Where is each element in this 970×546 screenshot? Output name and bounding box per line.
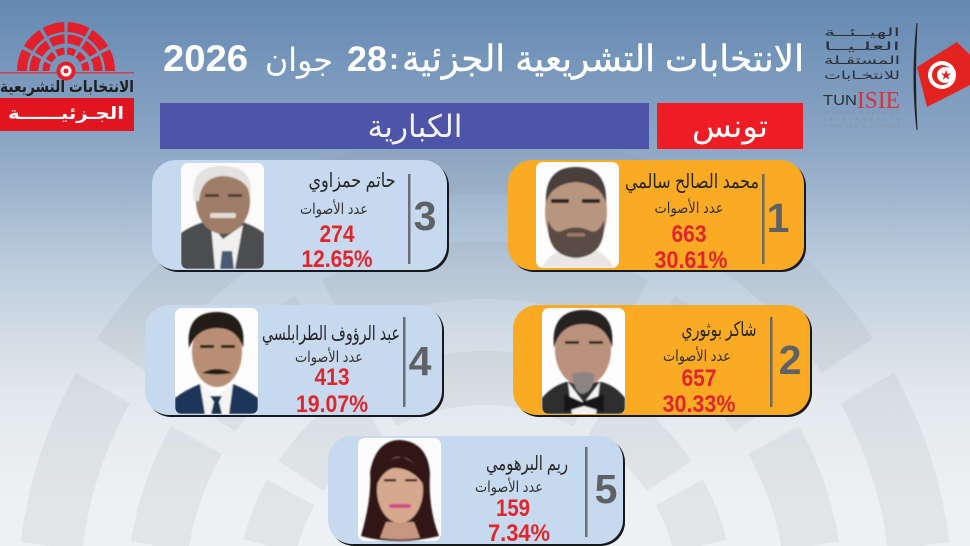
votes: 663 — [672, 221, 706, 248]
votes: 159 — [496, 495, 530, 522]
logo: ISIE: العلـيــا — [824, 41, 900, 53]
votes label: عدد الأصوات — [475, 477, 543, 496]
name: ريم البرهومي — [486, 453, 568, 476]
votes label: عدد الأصوات — [654, 198, 724, 217]
title — [163, 38, 804, 80]
votes label: عدد الأصوات — [295, 347, 363, 366]
logo: partial elections — [0, 27, 134, 131]
title: : — [389, 43, 399, 76]
logo: ISIE: المستقـلة — [824, 55, 900, 67]
percent: 19.07% — [296, 391, 368, 418]
logo: ISIE: TUN — [823, 92, 857, 109]
portrait: candidate 3 — [181, 163, 264, 269]
rank: 4 — [409, 338, 432, 384]
name: شاكر بوثوري — [682, 319, 756, 342]
logo: ISIE: INSTANCE SUPERIEURE — [824, 110, 900, 116]
card: candidate 4 — [145, 305, 444, 418]
logo: ISIE: ISIE — [857, 88, 900, 114]
logo: ISIE: POUR LES ELECTIONS — [824, 124, 900, 130]
name: حاتم حمزاوي — [308, 170, 396, 193]
region bar: Kebaria: الكبارية — [368, 109, 462, 145]
logo: ISIE — [823, 23, 917, 130]
rank: 3 — [414, 193, 436, 239]
votes: 274 — [320, 221, 355, 248]
card: candidate 3 — [152, 160, 449, 273]
portrait: candidate 1 — [536, 162, 619, 268]
logo: partial elections: الانتخابات التشريعية — [0, 79, 134, 96]
title: الانتخابات التشريعية الجزئية — [402, 38, 804, 80]
title: 28 — [347, 40, 387, 79]
logo: ISIE: الهيــئــة — [824, 27, 900, 39]
divider — [585, 447, 588, 537]
votes label: عدد الأصوات — [300, 199, 368, 218]
divider — [403, 317, 406, 407]
logo: ISIE: للانتخـابات — [824, 70, 900, 82]
name: محمد الصالح سالمي — [625, 171, 759, 194]
divider — [770, 317, 772, 407]
region bar: Kebaria — [160, 103, 649, 149]
card: candidate 5 — [328, 436, 625, 546]
rank: 1 — [767, 195, 789, 241]
name: عبد الرؤوف الطرابلسي — [262, 323, 400, 346]
divider — [762, 174, 764, 264]
votes: 413 — [314, 364, 350, 391]
percent: 30.33% — [662, 391, 736, 418]
card: candidate 1 — [508, 160, 806, 274]
card: candidate 2 — [513, 305, 812, 418]
votes: 657 — [682, 365, 716, 392]
icon: Tunisian flag — [917, 42, 970, 107]
title: جوان — [265, 42, 333, 79]
rank: 5 — [595, 466, 617, 512]
title: 2026 — [163, 38, 248, 79]
percent: 12.65% — [302, 246, 372, 273]
percent: 30.61% — [654, 247, 728, 274]
divider — [408, 174, 410, 264]
portrait: candidate 4 — [175, 308, 258, 414]
logo: ISIE: INDEPENDANTE — [824, 117, 900, 123]
region bar: Tunis — [657, 103, 803, 149]
portrait: candidate 2 — [542, 308, 625, 414]
rank: 2 — [779, 337, 801, 383]
logo: partial elections: الجـزئيــــــة — [8, 104, 124, 124]
votes label: عدد الأصوات — [663, 346, 731, 365]
portrait: candidate 5 — [358, 438, 441, 541]
region bar: Tunis: تونس — [692, 109, 768, 145]
